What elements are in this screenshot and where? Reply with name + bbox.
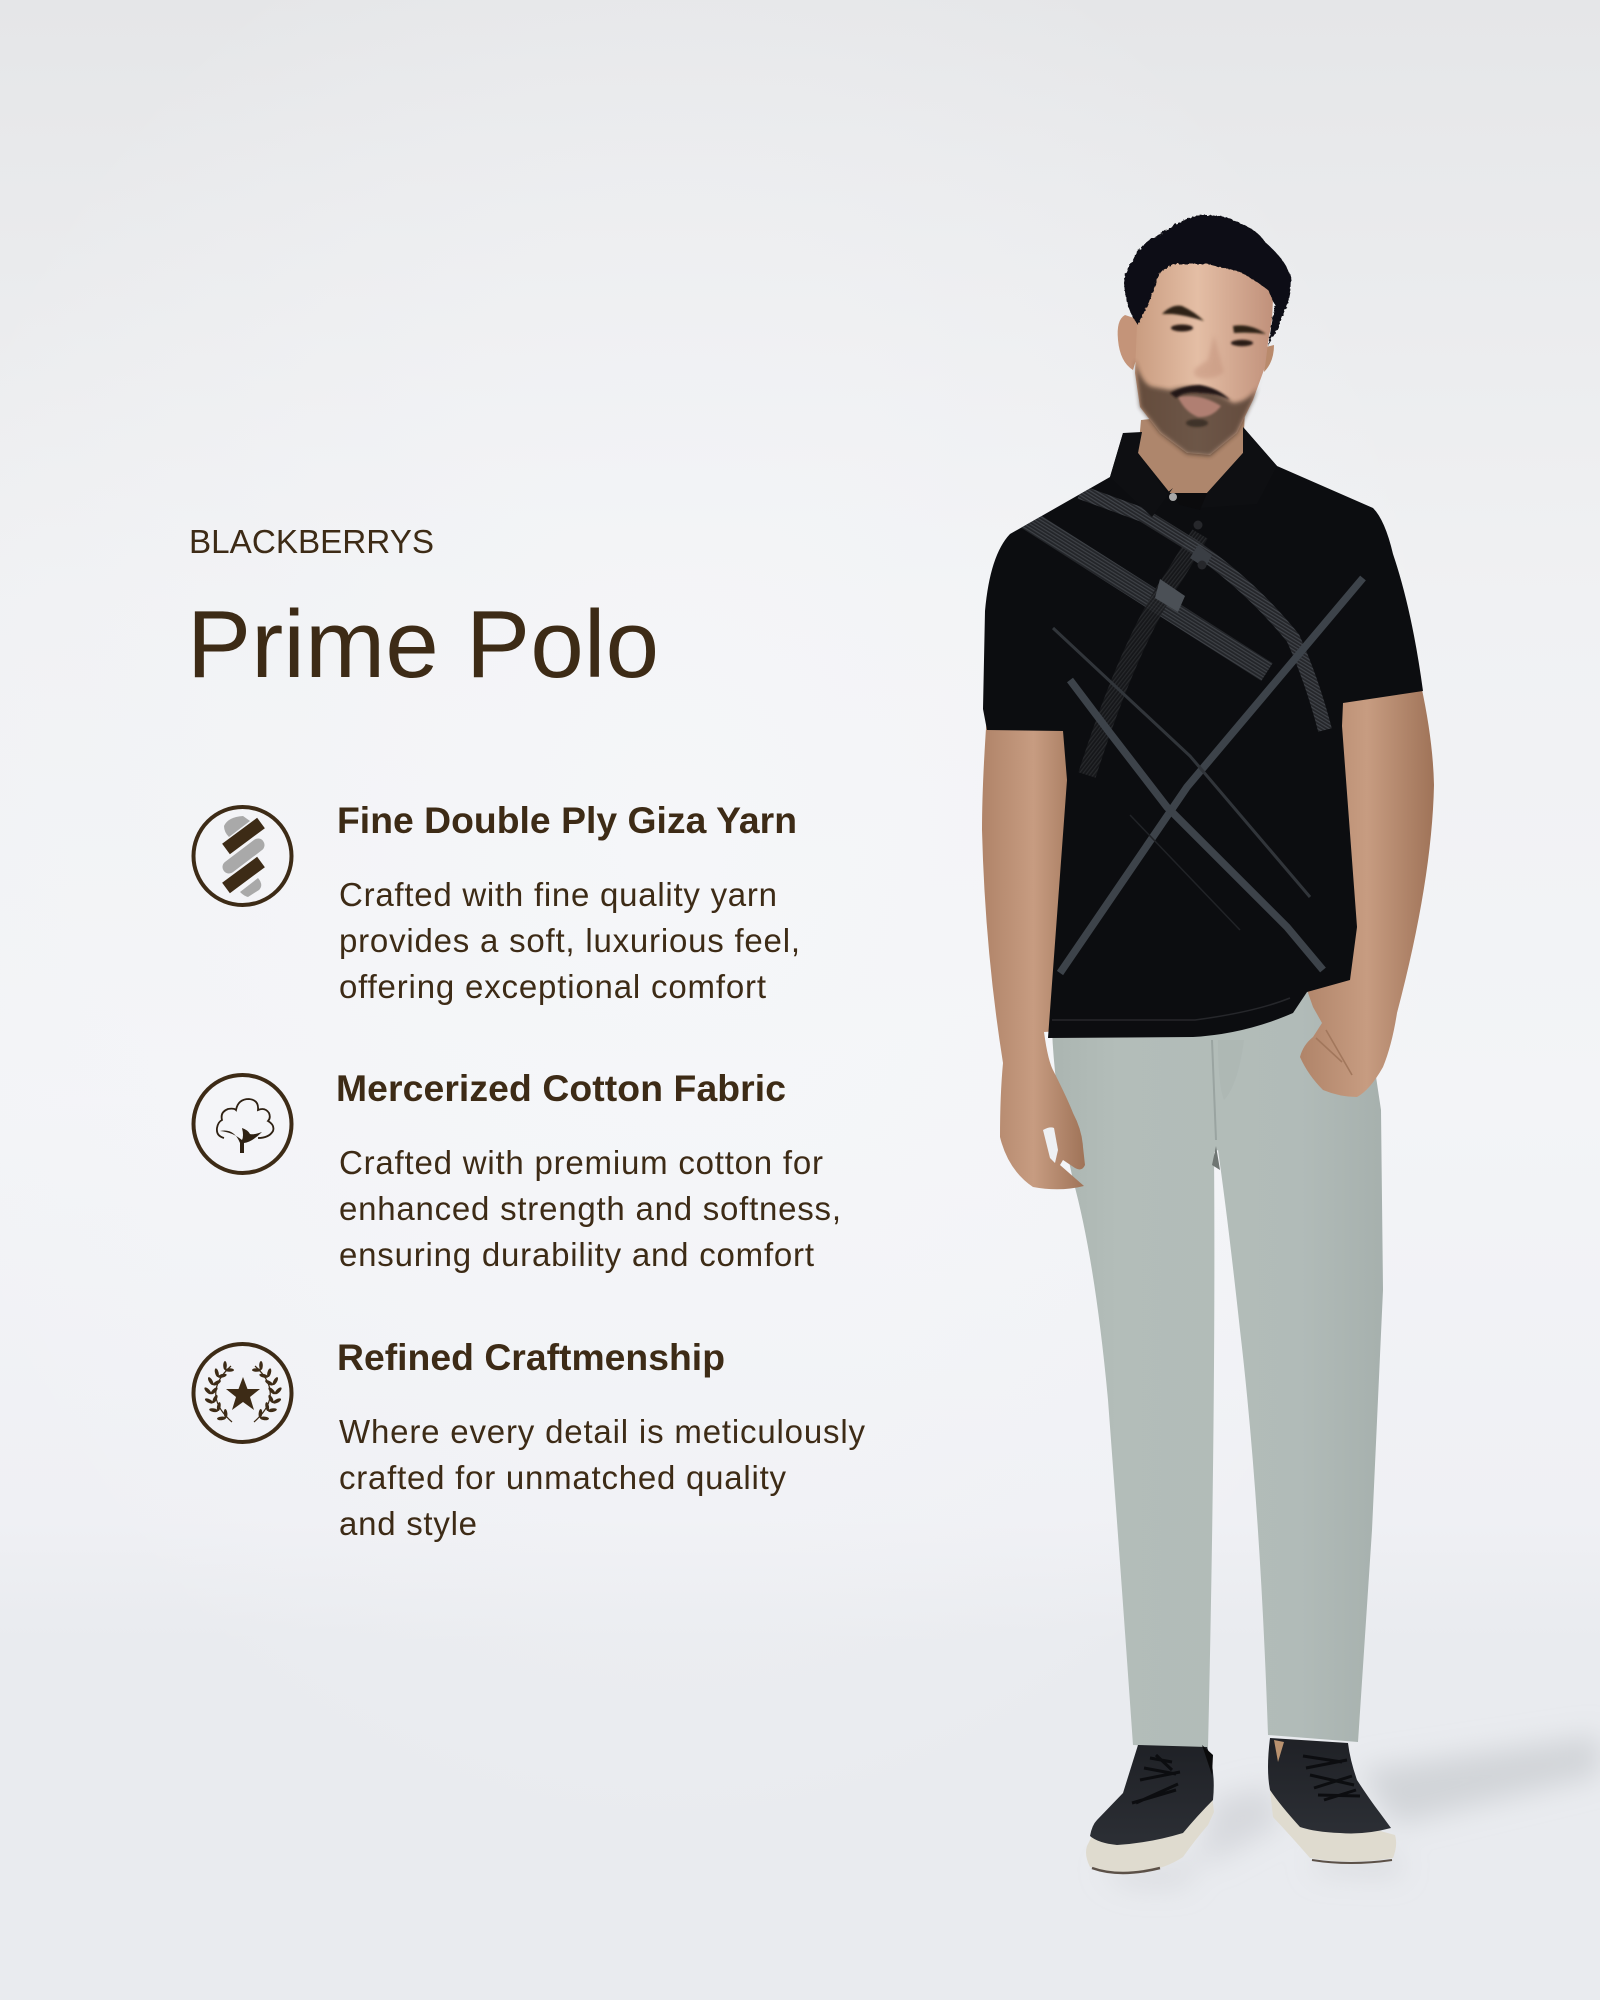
- shirt stripes: [1027, 492, 1363, 973]
- icon: yarn: [194, 807, 292, 905]
- description: [339, 1144, 841, 1273]
- description: offering exceptional comfort: [339, 968, 766, 1005]
- description: provides a soft, luxurious feel,: [339, 922, 800, 959]
- description: Crafted with premium cotton for: [339, 1144, 823, 1181]
- description: Where every detail is meticulously: [339, 1413, 866, 1450]
- right arm and hand: [1300, 685, 1434, 1097]
- neck: [1138, 410, 1245, 493]
- feature: cotton: [194, 1067, 841, 1273]
- description: crafted for unmatched quality: [339, 1459, 786, 1496]
- brand name: BLACKBERRYS: [189, 524, 434, 561]
- face: [1135, 252, 1274, 455]
- title: Prime Polo: [187, 591, 659, 698]
- polo shirt: [983, 427, 1423, 1038]
- head: [1110, 215, 1291, 570]
- left ear: [1118, 315, 1142, 370]
- description: enhanced strength and softness,: [339, 1190, 841, 1227]
- model figure: [982, 215, 1600, 1885]
- heading: Fine Double Ply Giza Yarn: [337, 799, 797, 841]
- feature: craftsmanship: [194, 1336, 866, 1542]
- trousers: [1052, 970, 1383, 1748]
- description: Crafted with fine quality yarn: [339, 876, 777, 913]
- description: and style: [339, 1505, 477, 1542]
- heading: Refined Craftmenship: [337, 1336, 725, 1378]
- hem line: [1052, 998, 1290, 1020]
- nose: [1194, 335, 1224, 379]
- collar: [1110, 432, 1173, 517]
- feature: yarn: [194, 799, 800, 1005]
- buttons: [1169, 493, 1206, 570]
- gap between fingers: [1043, 1127, 1058, 1163]
- eyes: [1171, 324, 1253, 346]
- beard: [1135, 360, 1265, 456]
- description: [339, 1413, 866, 1542]
- chin patch: [1186, 419, 1208, 427]
- icon: laurel and star: [194, 1344, 292, 1442]
- lips: [1178, 396, 1221, 417]
- floor shadows: [1100, 1735, 1600, 1885]
- heading: Mercerized Cotton Fabric: [336, 1067, 786, 1109]
- brows: [1162, 306, 1266, 334]
- description: [339, 876, 800, 1005]
- left shoe: [1086, 1745, 1214, 1873]
- description: ensuring durability and comfort: [339, 1236, 814, 1273]
- hair: [1124, 215, 1291, 346]
- icon: cotton: [194, 1075, 292, 1173]
- right ear: [1264, 345, 1274, 372]
- moustache: [1170, 385, 1230, 400]
- right shoe: [1268, 1738, 1396, 1863]
- left arm and hand: [982, 700, 1085, 1189]
